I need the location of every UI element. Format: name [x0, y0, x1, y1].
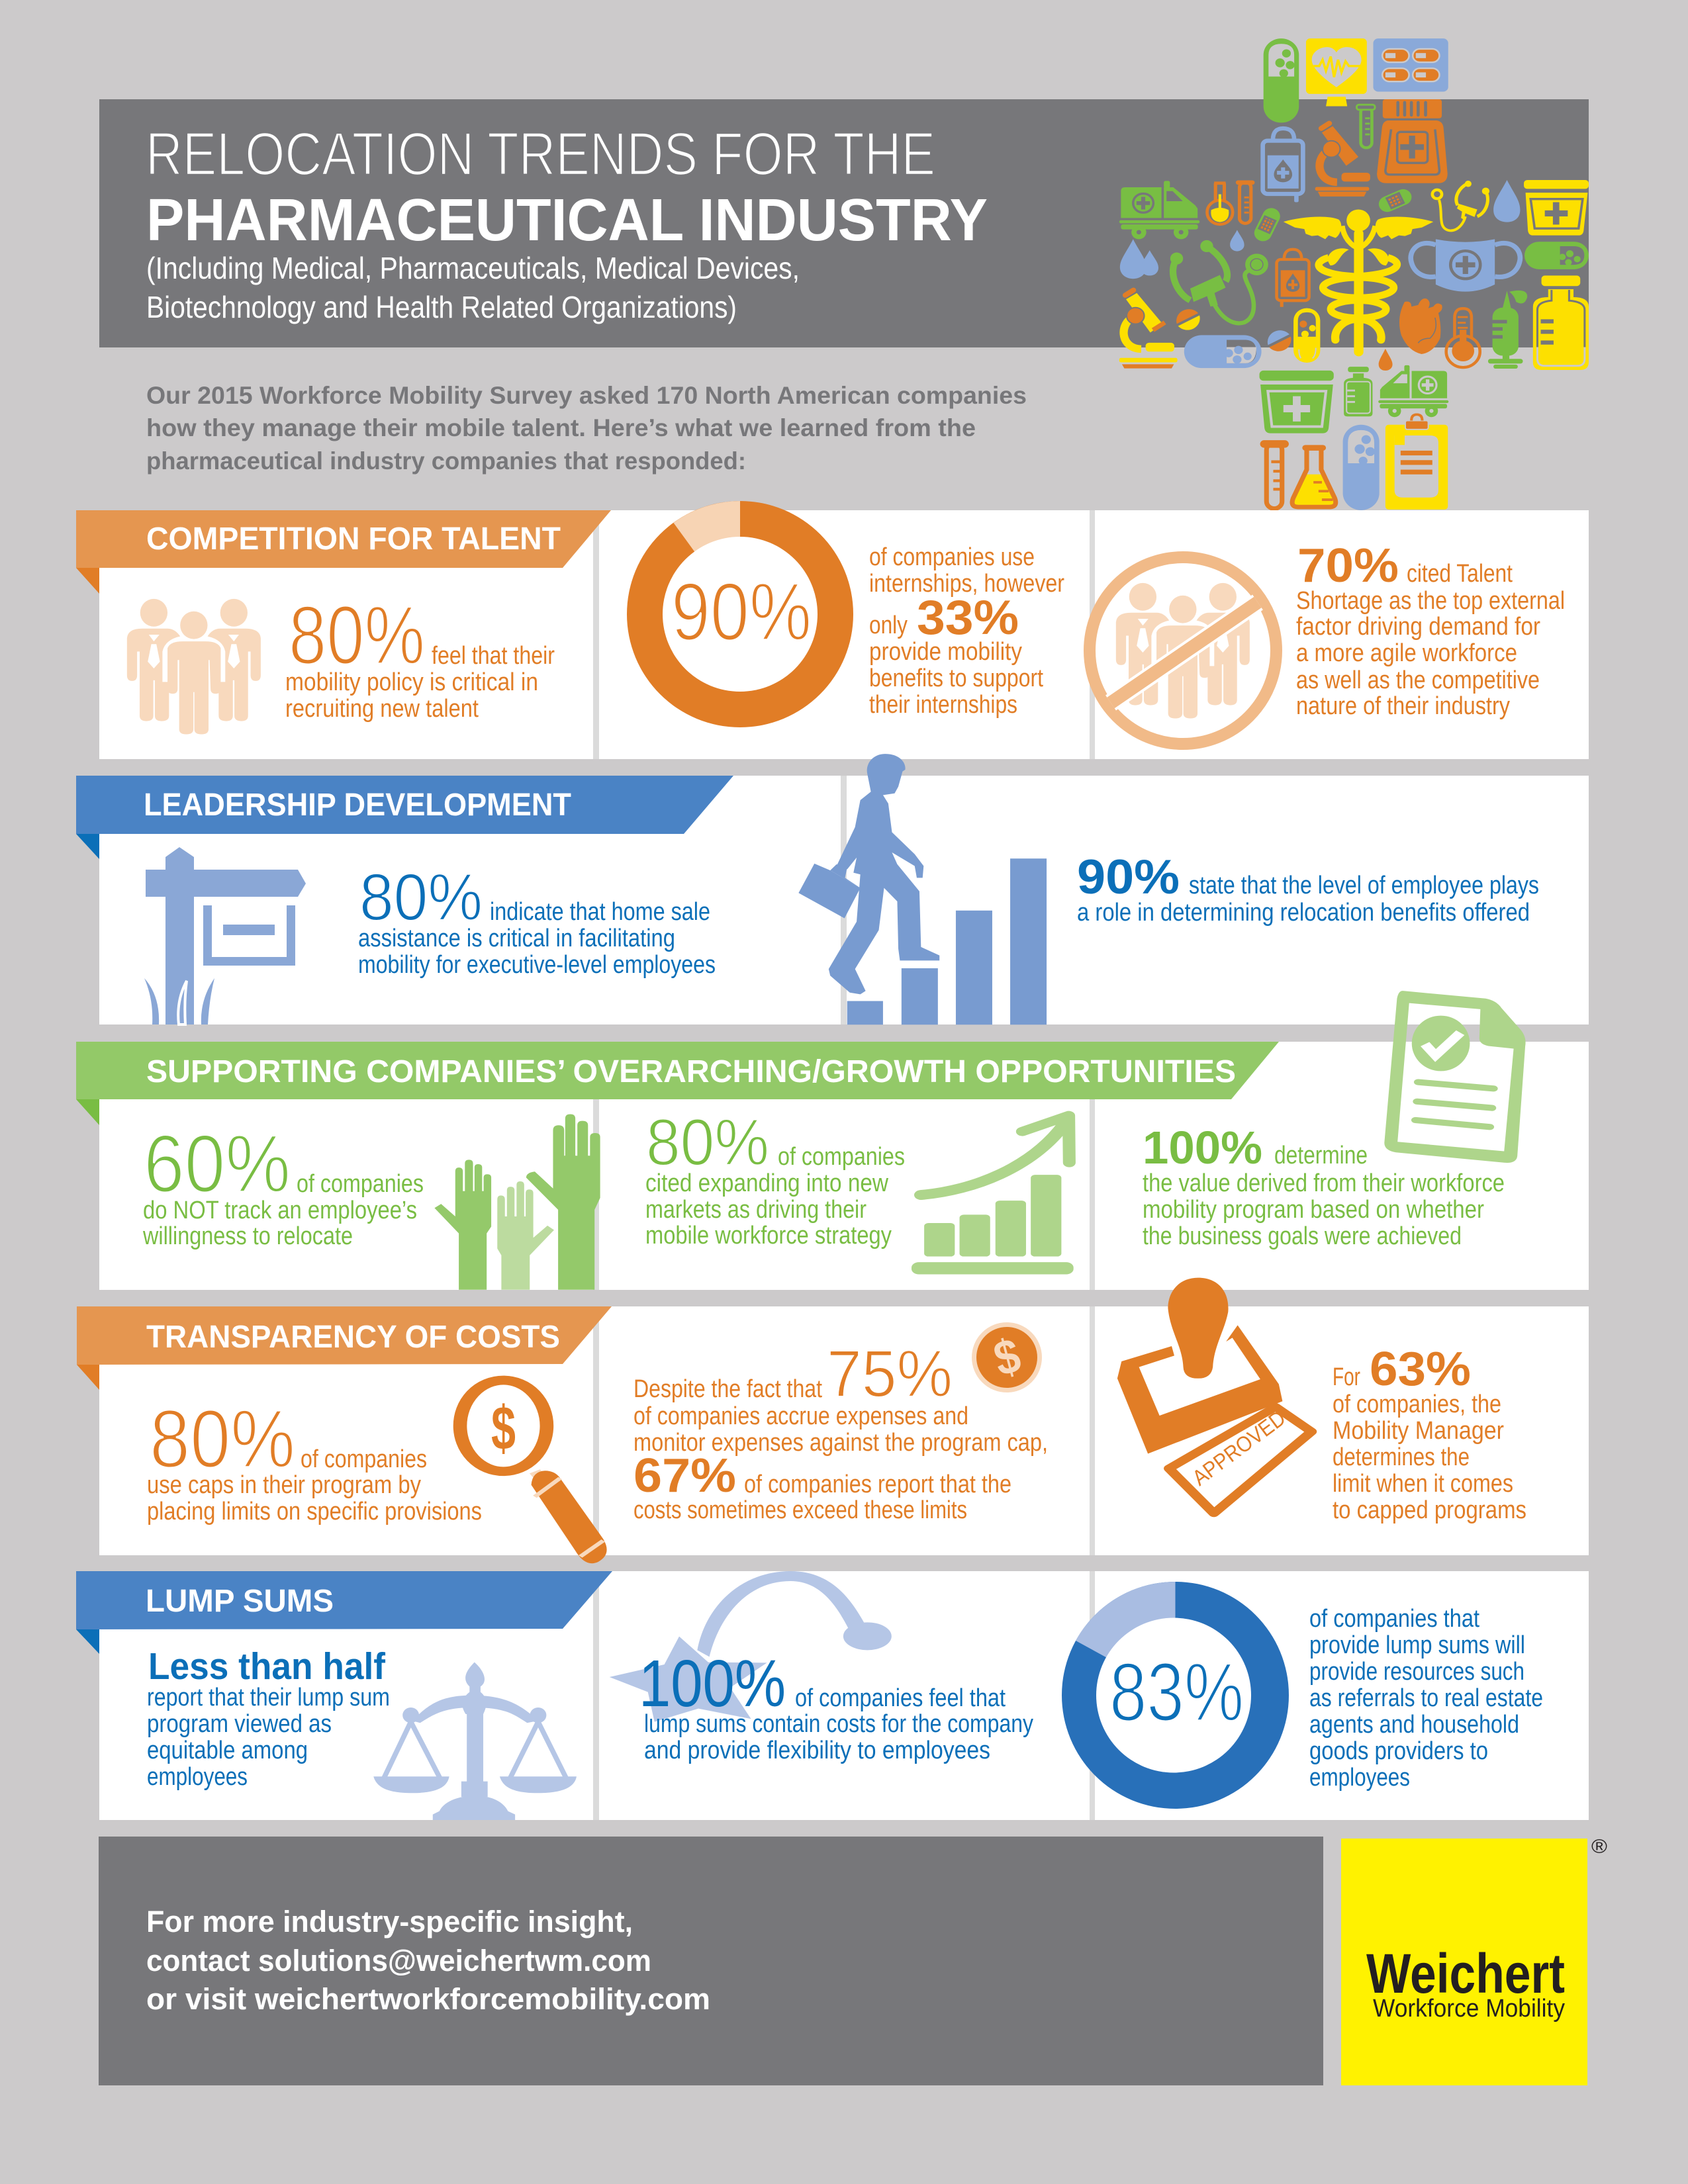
stat: 100% business goals: the value derived from their workforce: [1143, 1169, 1505, 1197]
stat: 80% mobility policy: feel that their: [432, 642, 555, 670]
icon: checked document: [1384, 991, 1526, 1163]
stat: 60% do not track: willingness to relocate: [142, 1222, 353, 1250]
stat: 80% home sale assistance: 80%: [359, 860, 483, 934]
title: RELOCATION TRENDS FOR THE: [146, 120, 935, 188]
stat: 75% and 67% expenses: of companies accrue expenses and: [633, 1402, 968, 1430]
stat: 80% expanding markets: [645, 1105, 905, 1250]
stat: 83% referrals: provide lump sums will: [1309, 1631, 1525, 1659]
contact text: For more industry-specific insight,: [146, 1905, 633, 1938]
banner: leadership development: [76, 776, 733, 859]
stat: 70% talent shortage: nature of their industry: [1296, 692, 1510, 720]
stat: internships: benefits to support: [869, 664, 1043, 692]
intro text: pharmaceutical industry companies that responded:: [146, 447, 746, 475]
header band: [99, 99, 1589, 347]
stat: 75% and 67% expenses: of companies report that the: [744, 1471, 1011, 1498]
stat: internships: internships, however: [869, 570, 1064, 598]
stat: 83% referrals: agents and household: [1309, 1711, 1519, 1739]
banner: supporting companies: [76, 1042, 1279, 1125]
chart: 90% donut: [627, 501, 853, 727]
chart: 83% donut: [1062, 1582, 1289, 1809]
stat: 80% use caps: of companies: [301, 1445, 427, 1473]
stat: 63% mobility manager: [1333, 1343, 1526, 1524]
stat: 80% use caps: 80%: [150, 1394, 295, 1485]
chart: 83% donut: 83%: [1109, 1647, 1244, 1739]
stat: less than half: [147, 1645, 390, 1791]
icon: person climbing bars: [798, 754, 1047, 1024]
banner: lump sums: LUMP SUMS: [146, 1584, 334, 1619]
icon: three people: [127, 599, 261, 734]
icon: pill pack: [1373, 38, 1448, 92]
stat: less than half: report that their lump sum: [147, 1684, 390, 1711]
icon: shooting star: [610, 1571, 892, 1722]
banner: competition for talent: COMPETITION FOR TALENT: [146, 522, 561, 557]
stat: 60% do not track: do NOT track an employee’s: [143, 1197, 417, 1224]
icon: green syringe: [1488, 291, 1527, 369]
icon: balance scale: [373, 1662, 577, 1820]
stat: 63% mobility manager: Mobility Manager: [1333, 1417, 1504, 1445]
icon: green ambulance: [1119, 181, 1199, 239]
stat: 100% business goals: the business goals were achieved: [1143, 1222, 1462, 1250]
icon: small green bottle: [1344, 367, 1372, 416]
icon: half pills: [1172, 305, 1295, 355]
stat: internships: only: [869, 612, 908, 639]
icon: orange test tube: [1260, 440, 1289, 508]
stat: 70% talent shortage: Shortage as the top external: [1296, 587, 1565, 615]
logo: Weichert: Workforce Mobility: [1373, 1995, 1565, 2023]
panel: transparency of costs: [77, 1278, 1589, 1563]
stat: internships: 33%: [917, 591, 1019, 645]
icon: dollar coin: $: [988, 1328, 1026, 1387]
stat: 80% expanding markets: markets as driving their: [645, 1196, 867, 1224]
icon: flask: [1292, 445, 1336, 507]
stat: 100% contain costs: [639, 1647, 1033, 1764]
icon: caduceus: [1284, 209, 1433, 356]
intro text: how they manage their mobile talent. Here’s what we learned from the: [146, 414, 976, 441]
stat: 90% level of employee: a role in determining relocation benefits offered: [1077, 899, 1530, 927]
icon: dollar coin: [972, 1322, 1042, 1392]
stat: 63% mobility manager: 63%: [1370, 1343, 1471, 1396]
icon: bandages: [1251, 187, 1415, 244]
icon: anatomical heart: [1399, 298, 1442, 354]
stat: 100% contain costs: lump sums contain costs for the company: [644, 1710, 1033, 1738]
stat: 83% referrals: goods providers to: [1309, 1737, 1488, 1765]
panel: lump sums: [76, 1571, 1589, 1820]
panel: competition for talent: [76, 501, 1589, 759]
stat: 83% referrals: as referrals to real estate: [1309, 1684, 1543, 1712]
icon: orange drop: [1379, 349, 1393, 371]
stat: 75% and 67% expenses: [633, 1337, 1048, 1524]
stat: 80% mobility policy: mobility policy is critical in: [285, 668, 538, 696]
stat: 100% business goals: mobility program based on whether: [1143, 1196, 1484, 1224]
icon: green ambulance lower: [1378, 365, 1448, 417]
icon: approved stamp: [1117, 1278, 1311, 1514]
icon: yellow microscope: [1119, 290, 1178, 369]
icon: approved stamp: APPROVED: [1188, 1406, 1290, 1490]
chart: 90% donut: 90%: [671, 567, 812, 658]
stat: internships: their internships: [869, 691, 1017, 719]
stat: less than half: employees: [147, 1763, 248, 1791]
stat: 100% business goals: 100%: [1143, 1122, 1262, 1173]
icon: blue face mask: [1411, 239, 1520, 292]
stat: 80% home sale assistance: [358, 860, 716, 979]
icon: magnifying glass: $: [491, 1393, 516, 1463]
icon: yellow capsule: [1293, 308, 1320, 363]
stat: 63% mobility manager: of companies, the: [1333, 1390, 1501, 1418]
icon: heart monitor: [1306, 38, 1367, 107]
stat: 70% talent shortage: factor driving demand for: [1296, 613, 1540, 641]
stat: 70% talent shortage: cited Talent: [1407, 560, 1513, 588]
stat: 100% contain costs: and provide flexibility to employees: [644, 1737, 990, 1764]
stat: 63% mobility manager: to capped programs: [1333, 1496, 1526, 1524]
banner: transparency of costs: [77, 1306, 612, 1390]
stat: 60% do not track: [142, 1119, 424, 1250]
icon: big green stethoscope: [1170, 240, 1266, 323]
stat: 75% and 67% expenses: monitor expenses against the program cap,: [633, 1429, 1048, 1457]
banner: leadership development: LEADERSHIP DEVELOPMENT: [144, 788, 571, 823]
icon: blue IV bag: [1263, 128, 1303, 202]
stat: internships: [869, 543, 1064, 719]
stat: 90% level of employee: [1077, 850, 1539, 927]
stat: 80% home sale assistance: indicate that home sale: [490, 898, 710, 926]
icon: orange IV bag: [1277, 250, 1309, 307]
stat: 80% mobility policy: [285, 590, 555, 723]
icon: clipboard: [1385, 414, 1448, 510]
icon: orange bottle: [1377, 99, 1448, 183]
stat: less than half: Less than half: [148, 1645, 386, 1688]
stat: 75% and 67% expenses: 67%: [633, 1449, 736, 1502]
stat: 90% level of employee: 90%: [1077, 850, 1180, 904]
stat: 63% mobility manager: determines the: [1333, 1443, 1470, 1471]
icon: people crossed out: [1090, 557, 1276, 744]
icon: green first aid kit: [1260, 371, 1334, 433]
stat: 63% mobility manager: For: [1333, 1363, 1360, 1391]
footer panel: [99, 1837, 1323, 2085]
stat: 100% business goals: [1143, 1122, 1505, 1250]
intro text: [146, 382, 1027, 475]
banner: supporting companies: SUPPORTING COMPANIES’ OVERARCHING/GROWTH OPPORTUNITIES: [146, 1054, 1236, 1089]
icon: yellow first aid kit: [1524, 180, 1589, 236]
stat: 80% mobility policy: recruiting new talent: [285, 695, 479, 723]
stat: 83% referrals: employees: [1309, 1764, 1410, 1792]
stat: 80% expanding markets: cited expanding into new: [645, 1169, 888, 1197]
icon: flask and test tube: [1207, 180, 1254, 224]
stat: 80% use caps: use caps in their program by: [147, 1471, 421, 1499]
icon: water drops: [1120, 180, 1520, 279]
icon: small stethoscope: [1432, 181, 1489, 231]
stat: 83% referrals: provide resources such: [1309, 1658, 1524, 1686]
banner: transparency of costs: TRANSPARENCY OF COSTS: [146, 1320, 560, 1355]
stat: 90% level of employee: state that the level of employee plays: [1189, 872, 1539, 899]
stat: 80% use caps: [147, 1394, 482, 1525]
stat: 75% and 67% expenses: Despite the fact that: [633, 1375, 822, 1403]
stat: 80% home sale assistance: assistance is critical in facilitating: [358, 925, 675, 952]
icon: green capsule: [1264, 38, 1299, 122]
icon: yellow bottle: [1533, 275, 1589, 370]
icon: thermometer: [1446, 308, 1480, 367]
icon: for sale sign: [144, 847, 306, 1024]
stat: 70% talent shortage: as well as the competitive: [1296, 666, 1540, 694]
panel: supporting companies growth: [76, 991, 1589, 1290]
title: PHARMACEUTICAL INDUSTRY: [146, 187, 988, 253]
icon: magnifying glass: [460, 1381, 607, 1563]
stat: 60% do not track: 60%: [144, 1119, 291, 1210]
stat: 80% expanding markets: 80%: [646, 1105, 769, 1179]
stat: 100% contain costs: 100%: [639, 1647, 786, 1721]
intro text: Our 2015 Workforce Mobility Survey asked 170 North American companies: [146, 382, 1027, 409]
stat: 75% and 67% expenses: 75%: [827, 1337, 953, 1411]
logo: Weichert: ®: [1591, 1836, 1607, 1858]
banner: competition for talent: [76, 510, 611, 594]
title: Biotechnology and Health Related Organizations): [146, 290, 737, 324]
contact text: [146, 1905, 710, 2016]
stat: 70% talent shortage: a more agile workforce: [1296, 639, 1517, 667]
stat: 80% mobility policy: 80%: [289, 590, 425, 682]
stat: internships: provide mobility: [869, 638, 1022, 666]
stat: 80% use caps: placing limits on specific provisions: [147, 1498, 482, 1525]
stat: 63% mobility manager: limit when it comes: [1333, 1470, 1513, 1498]
stat: 80% expanding markets: of companies: [778, 1143, 905, 1171]
stat: 100% contain costs: of companies feel that: [795, 1684, 1006, 1712]
contact text: or visit weichertworkforcemobility.com: [146, 1982, 710, 2016]
icon: blue horizontal capsule: [1184, 335, 1262, 368]
stat: 83% referrals: [1309, 1605, 1543, 1792]
icon: growth chart: [912, 1116, 1074, 1275]
logo: Weichert: Weichert: [1366, 1942, 1565, 2005]
icon: orange microscope: [1315, 123, 1370, 197]
banner: lump sums: [76, 1571, 612, 1654]
stat: 70% talent shortage: [1296, 539, 1565, 720]
stat: 75% and 67% expenses: costs sometimes exceed these limits: [633, 1496, 967, 1524]
stat: 80% expanding markets: mobile workforce strategy: [645, 1222, 892, 1250]
icon: green test tube: [1356, 105, 1375, 148]
title: (Including Medical, Pharmaceuticals, Medical Devices,: [146, 251, 800, 285]
medical icons cross: [1119, 38, 1589, 510]
stat: 60% do not track: of companies: [297, 1170, 424, 1198]
stat: 100% business goals: determine: [1274, 1142, 1368, 1169]
icon: blue capsule lower: [1343, 425, 1380, 510]
icon: green horizontal capsule: [1524, 242, 1589, 269]
icon: raised hands: [434, 1114, 600, 1290]
stat: 80% home sale assistance: mobility for executive-level employees: [358, 951, 716, 979]
logo: Weichert: [1341, 1836, 1607, 2085]
stat: less than half: program viewed as: [147, 1710, 332, 1738]
title: [146, 120, 988, 324]
stat: 83% referrals: of companies that: [1309, 1605, 1479, 1633]
stat: 70% talent shortage: 70%: [1297, 539, 1399, 592]
stat: internships: of companies use: [869, 543, 1035, 571]
stat: less than half: equitable among: [147, 1737, 308, 1764]
contact text: contact solutions@weichertwm.com: [146, 1944, 651, 1978]
panel: leadership development: [76, 754, 1589, 1024]
